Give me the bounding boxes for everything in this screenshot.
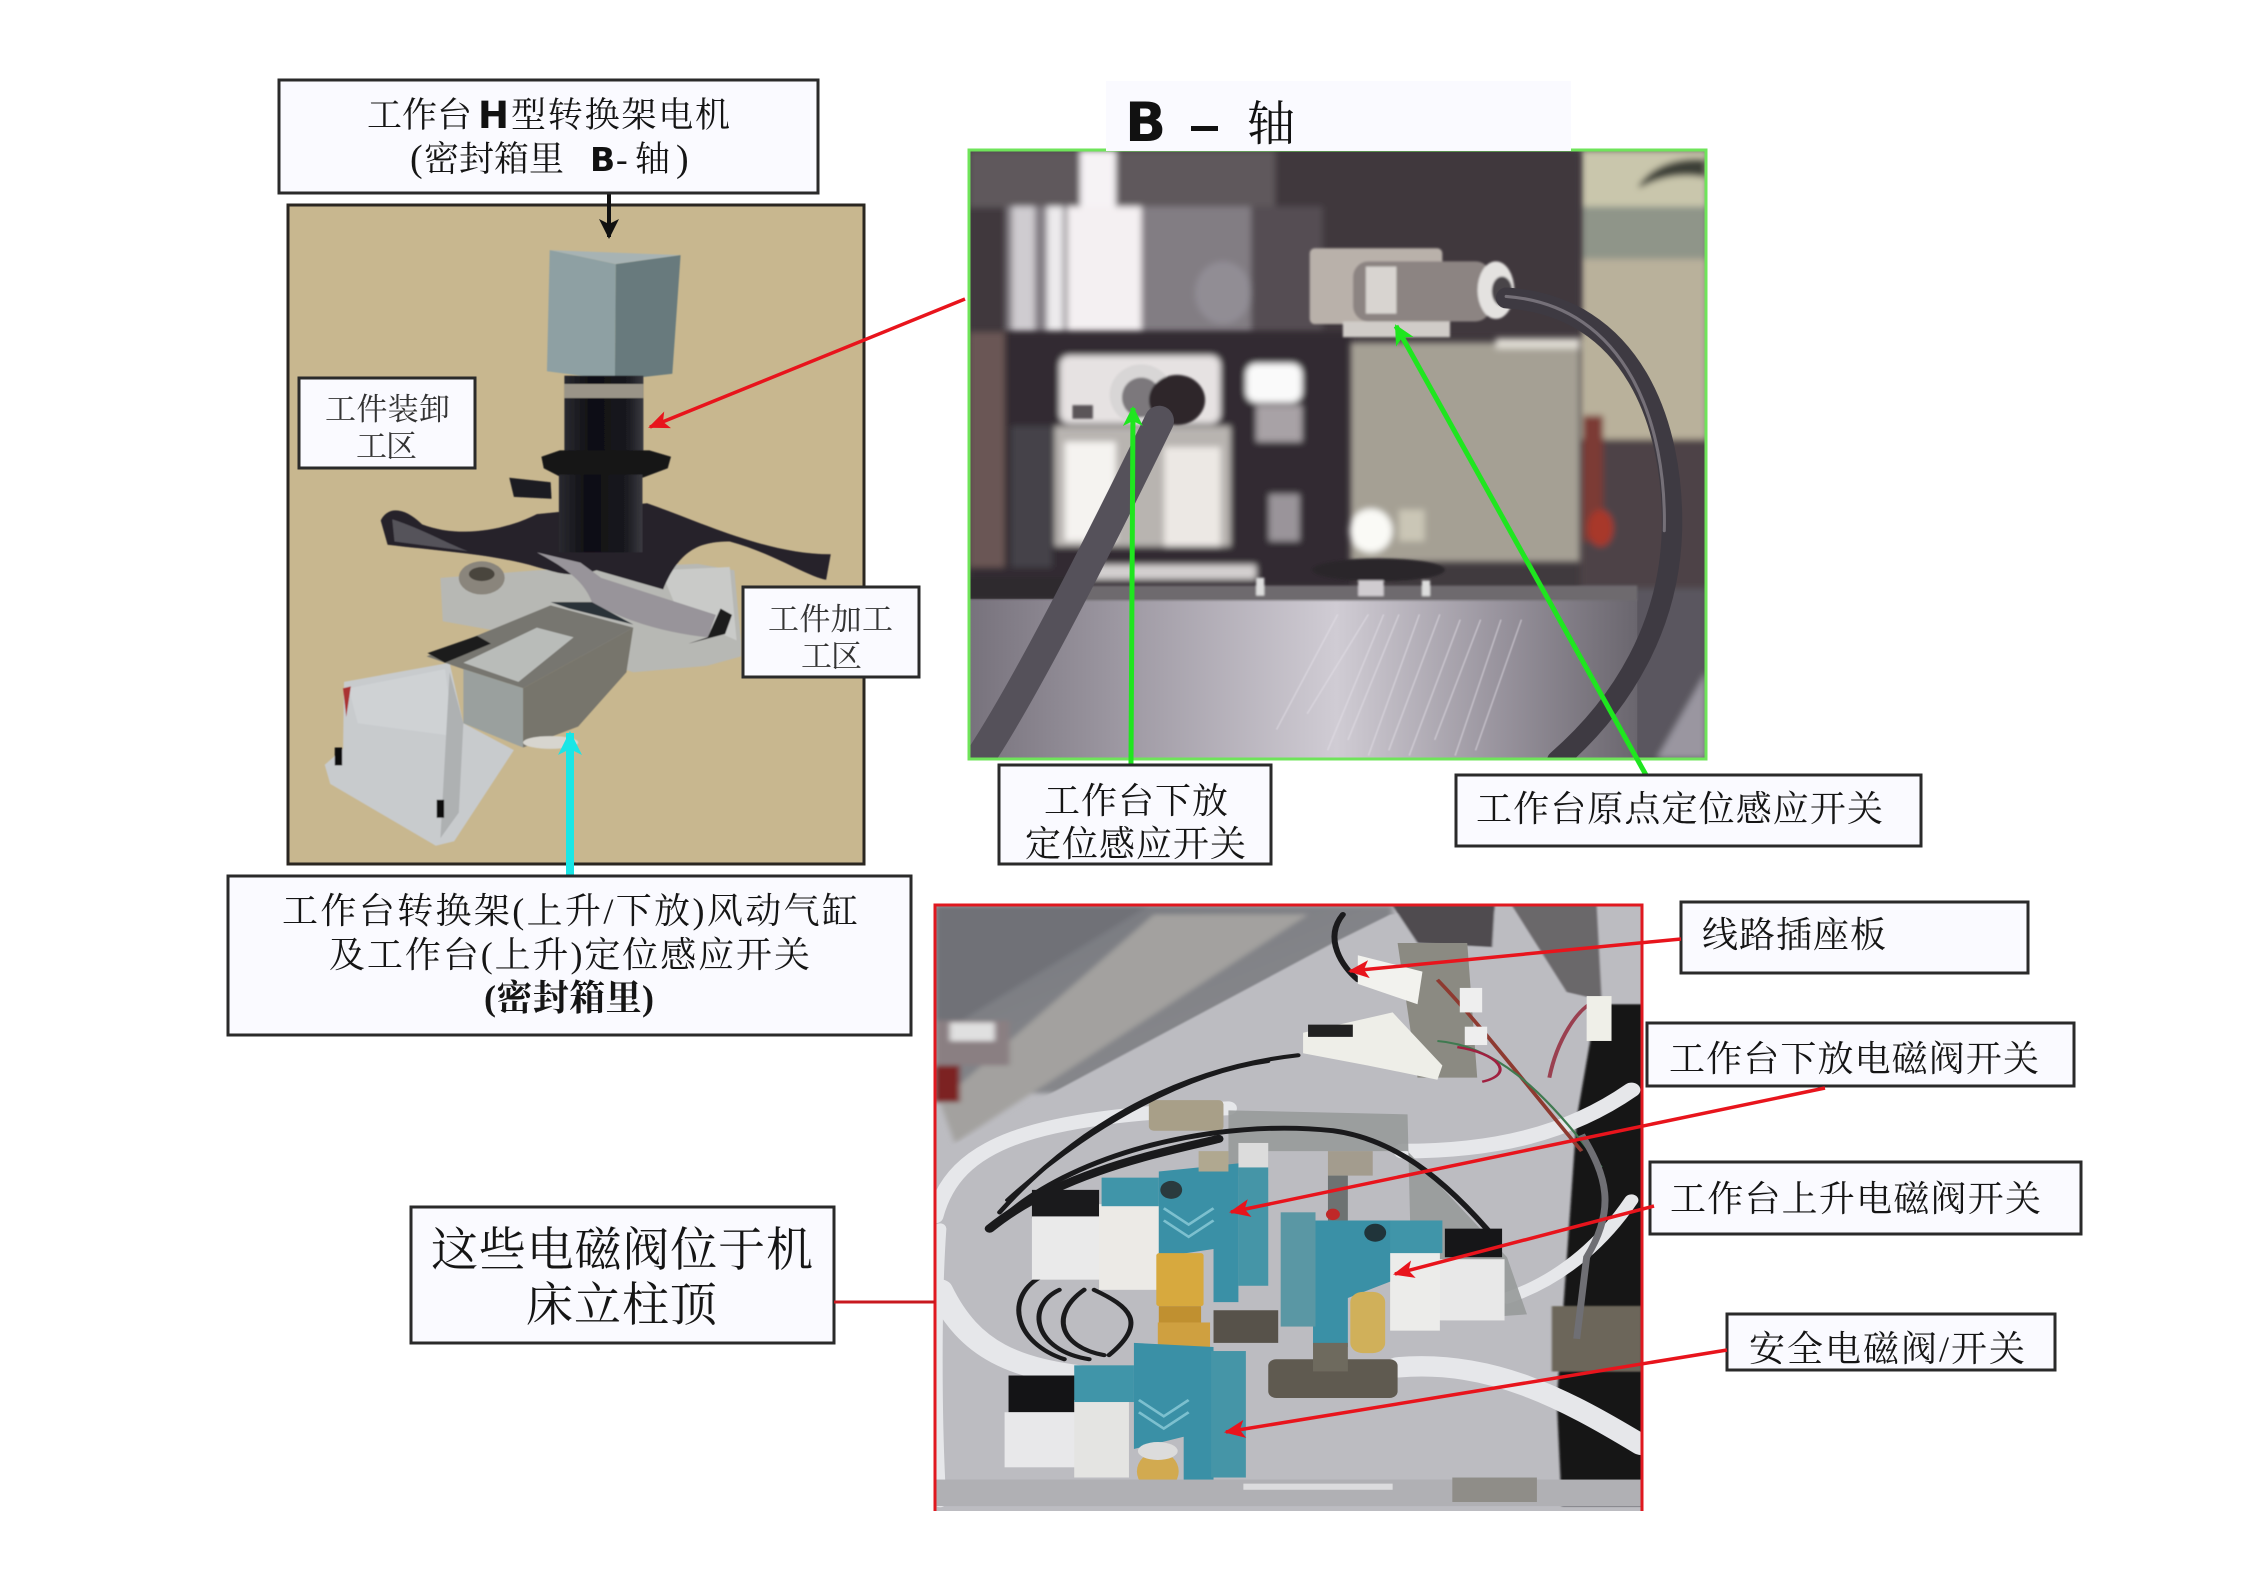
icon: pneumatic base and steel housing [325, 561, 741, 846]
icon: solenoid valve 2 [1281, 1151, 1505, 1353]
label: machining zone [743, 587, 919, 677]
label: cylinder and sensors: 工作台转换架(上升/下放)风动气缸 [282, 891, 858, 931]
title patch: B axis [1106, 81, 1571, 154]
arrow: green arrow to origin sensor [1396, 326, 1646, 775]
label: motor: - [616, 140, 628, 179]
arrow: cyan arrow to cylinder [566, 733, 574, 875]
label: motor [279, 80, 818, 193]
icon: upper left machine area [935, 906, 1393, 1143]
arrow: to safety solenoid [1226, 1350, 1727, 1432]
icon: upper metal drum [969, 150, 1581, 338]
icon: sensor cables [978, 296, 1672, 761]
connector: note to photo [834, 1300, 935, 1304]
label: cylinder and sensors: 及工作台(上升)定位感应开关 [329, 935, 810, 975]
panel: H-frame assembly photo [288, 205, 864, 864]
label: solenoid valve location note [411, 1207, 834, 1343]
icon: origin sensor body [1310, 248, 1514, 337]
arrow: to lower solenoid [1231, 1088, 1825, 1212]
icon: motor housing cube [547, 250, 681, 380]
label: solenoid valve location note: 这些电磁阀位于机 [431, 1225, 813, 1277]
arrow: green arrow to lower sensor [1131, 408, 1133, 764]
label: solenoid valve location note: 床立柱顶 [526, 1280, 718, 1332]
label: motor: 轴 [635, 140, 670, 179]
label: table raise solenoid: 工作台上升电磁阀开关 [1670, 1179, 2041, 1219]
icon: brass fittings [1156, 1253, 1210, 1347]
label: motor: 密封箱里 [424, 140, 564, 179]
icon: origin sensor block [1349, 338, 1580, 562]
icon: right dark area [1552, 1004, 1642, 1506]
title patch: B axis: 轴 [1247, 98, 1295, 151]
arrow: to raise solenoid [1395, 1206, 1654, 1274]
arrow: black arrow to motor [607, 193, 611, 237]
label: safety solenoid [1727, 1314, 2055, 1370]
arrow: red arrow from B axis photo to column [650, 299, 965, 427]
icon: solenoid valve 1 [1032, 1151, 1268, 1302]
label: motor: H [478, 94, 509, 137]
title patch: B axis: B [1125, 91, 1166, 154]
label: safety solenoid: 安全电磁阀/开关 [1749, 1329, 2025, 1369]
label: cylinder and sensors: (密封箱里) [484, 978, 654, 1018]
icon: black wiring [990, 914, 1497, 1359]
icon: lower sensor head [1072, 364, 1205, 425]
label: table raise solenoid [1650, 1162, 2081, 1234]
icon: brackets [1149, 1100, 1527, 1322]
label: motor: 型转换架电机 [511, 96, 730, 135]
icon: main sheet plate [1048, 906, 1603, 1096]
label: motor: ) [676, 138, 689, 180]
label: motor: ( [410, 138, 423, 180]
icon: air tubes [935, 1090, 1641, 1502]
label: lower position sensor: 工作台下放 [1044, 781, 1228, 821]
icon: right background [1580, 150, 1708, 761]
label: lower position sensor: 定位感应开关 [1025, 824, 1246, 864]
icon: middle band and bracket [969, 332, 1352, 588]
label: machining zone: 工区 [801, 639, 862, 674]
arrow: to socket board [1350, 939, 1681, 971]
label: origin sensor: 工作台原点定位感应开关 [1476, 789, 1883, 829]
icon: lower strip [935, 1478, 1641, 1506]
icon: black column [541, 376, 671, 552]
label: wiring socket board: 线路插座板 [1702, 915, 1886, 955]
label: motor: B [590, 140, 615, 179]
label: machining zone: 工件加工 [768, 602, 893, 637]
panel: solenoid valves photo [935, 905, 1642, 1511]
label: table lower solenoid [1647, 1023, 2074, 1086]
label: motor: 工作台 [367, 96, 472, 135]
label: table lower solenoid: 工作台下放电磁阀开关 [1669, 1039, 2039, 1079]
icon: solenoid valve 3 [1005, 1343, 1246, 1491]
label: wiring socket board [1681, 902, 2028, 973]
icon: steel base [969, 599, 1637, 761]
label: lower position sensor [999, 765, 1271, 864]
label: origin sensor [1456, 775, 1921, 846]
panel: B-axis sensor photo [969, 150, 1708, 761]
icon: connector board [1303, 943, 1612, 1339]
label: cylinder and sensors [228, 876, 911, 1035]
icon: metal tee fitting [1214, 1310, 1398, 1398]
label: loading zone [299, 378, 475, 468]
label: loading zone: 工件装卸 [325, 392, 450, 427]
label: loading zone: 工区 [356, 429, 417, 464]
icon: H-frame arms [381, 478, 831, 644]
